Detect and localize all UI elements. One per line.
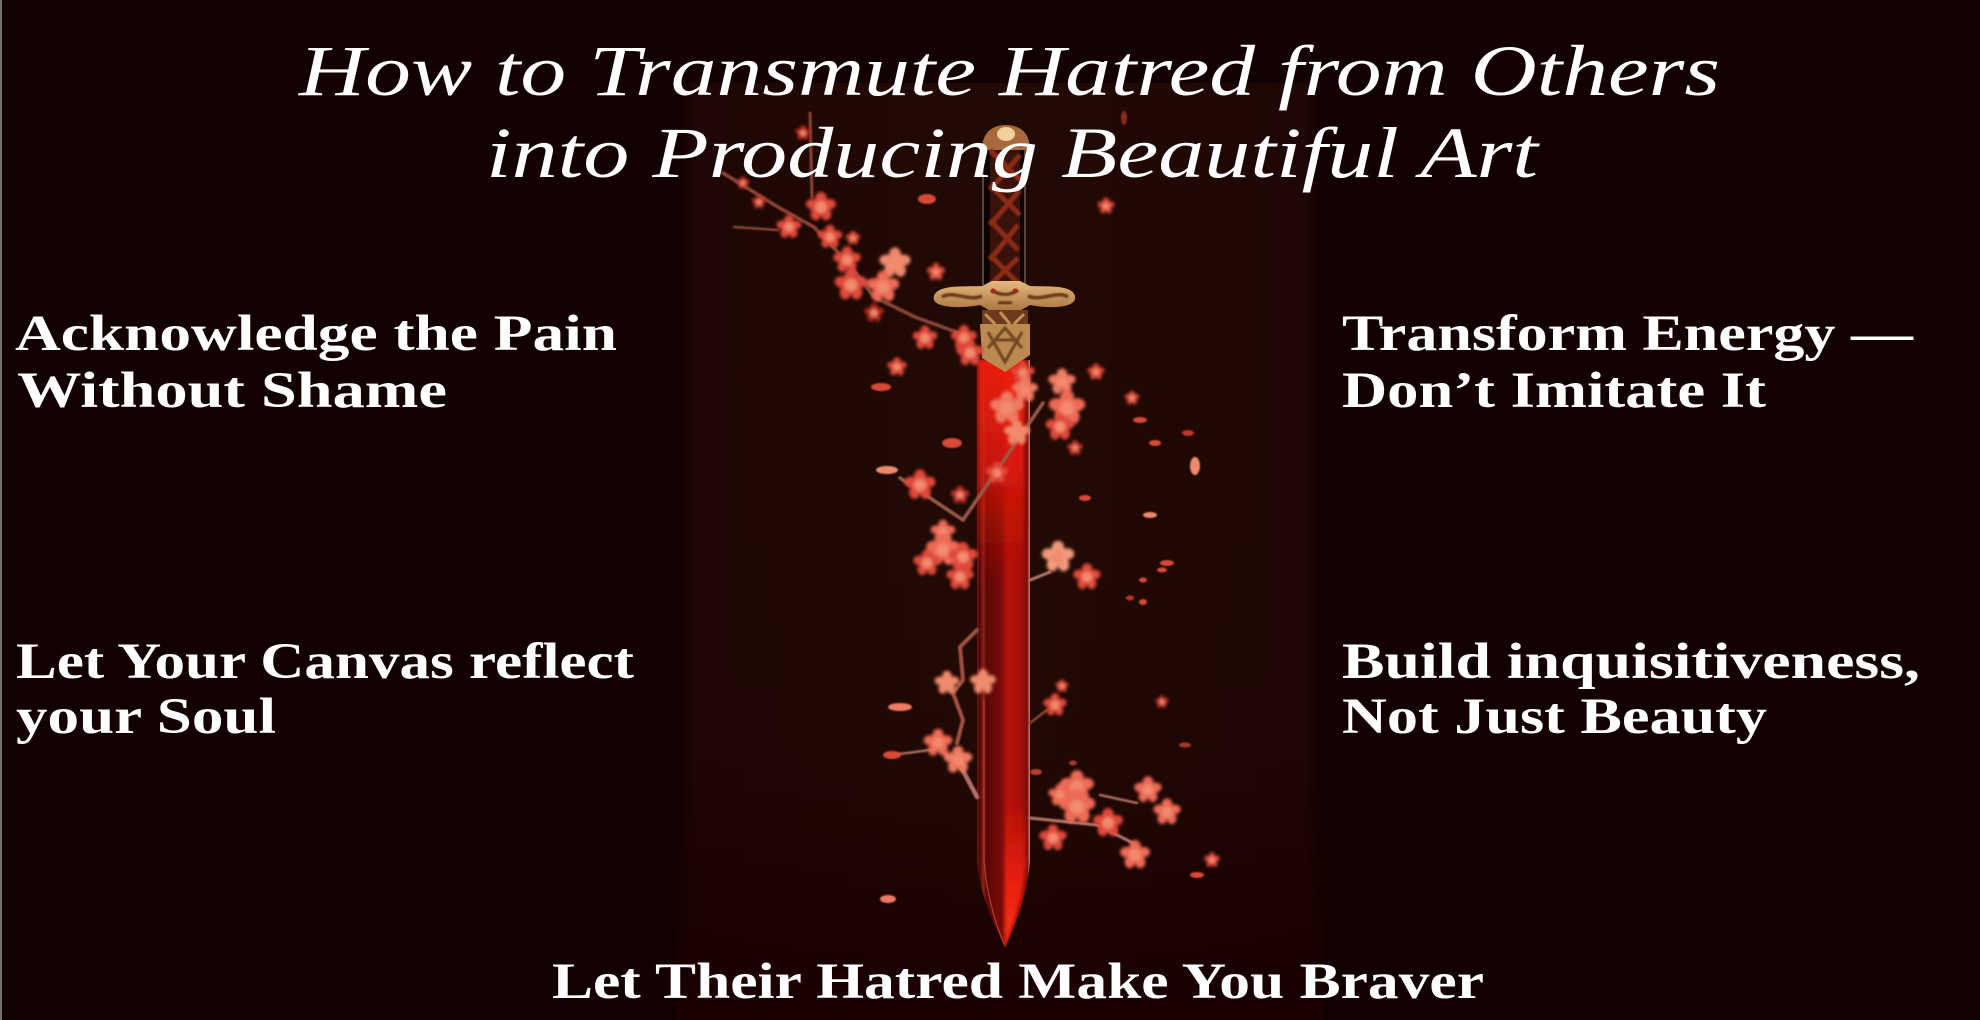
heading: build inquisitiveness: Build inquisitiveness, xyxy=(1342,634,1920,690)
heading: transform energy: Don’t Imitate It xyxy=(1342,363,1766,419)
title: into Producing Beautiful Art xyxy=(486,113,1541,193)
closing line: Let Their Hatred Make You Braver xyxy=(552,954,1484,1010)
heading: let your canvas reflect your soul xyxy=(16,634,634,745)
heading: transform energy: Transform Energy — xyxy=(1342,306,1914,362)
heading: acknowledge the pain: Without Shame xyxy=(17,363,447,419)
pommel xyxy=(982,125,1030,150)
branches xyxy=(723,113,1137,843)
illustration: sword with blossoms xyxy=(723,111,1220,948)
crossguard xyxy=(934,281,1075,312)
collar ornament xyxy=(980,310,1030,372)
blossoms xyxy=(736,125,1220,868)
heading: acknowledge the pain xyxy=(15,306,617,419)
grip xyxy=(983,150,1025,286)
heading: build inquisitiveness xyxy=(1342,634,1920,745)
heading: let your canvas reflect your soul: your Soul xyxy=(16,689,276,745)
title xyxy=(298,31,1720,193)
falling petals xyxy=(871,111,1204,903)
heading: acknowledge the pain: Acknowledge the Pain xyxy=(15,306,617,362)
hilt xyxy=(934,125,1075,372)
blade xyxy=(977,360,1030,948)
central image panel xyxy=(677,83,1323,1020)
title: How to Transmute Hatred from Others xyxy=(298,31,1720,111)
heading: build inquisitiveness: Not Just Beauty xyxy=(1342,689,1767,745)
heading: let your canvas reflect your soul: Let Your Canvas reflect xyxy=(16,634,634,690)
left edge line xyxy=(0,0,2,1020)
panel bottom fade xyxy=(677,500,1323,1020)
heading: transform energy xyxy=(1342,306,1914,419)
